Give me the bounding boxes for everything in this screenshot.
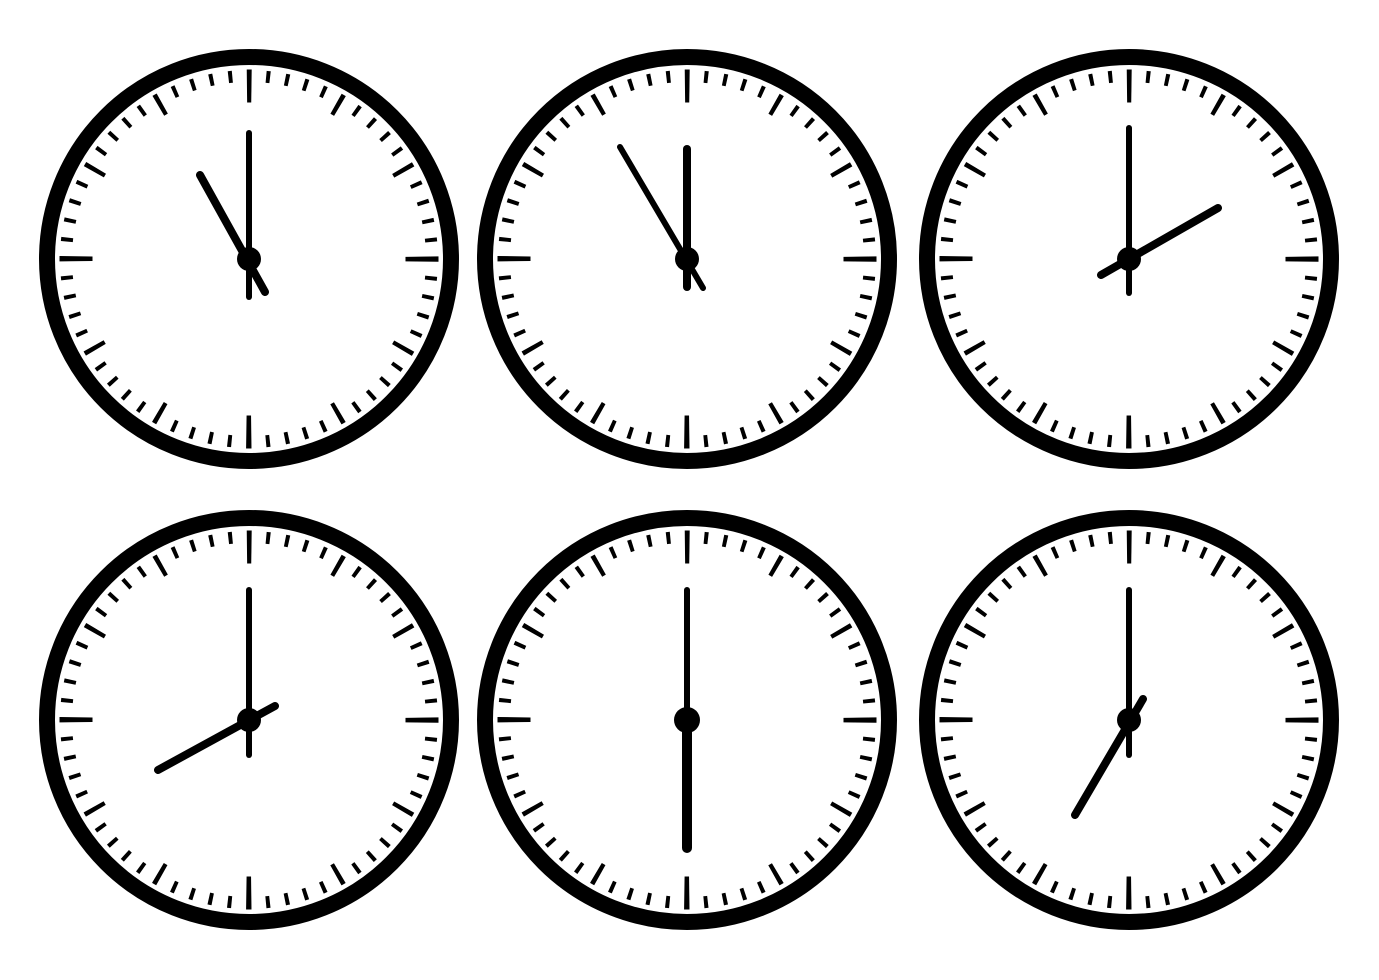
clock 1 (47, 57, 451, 461)
clock 2 (485, 57, 889, 461)
clock 3 (927, 57, 1331, 461)
clock 5 (485, 518, 889, 922)
clock 6 (927, 518, 1331, 922)
clock 4 (47, 518, 451, 922)
